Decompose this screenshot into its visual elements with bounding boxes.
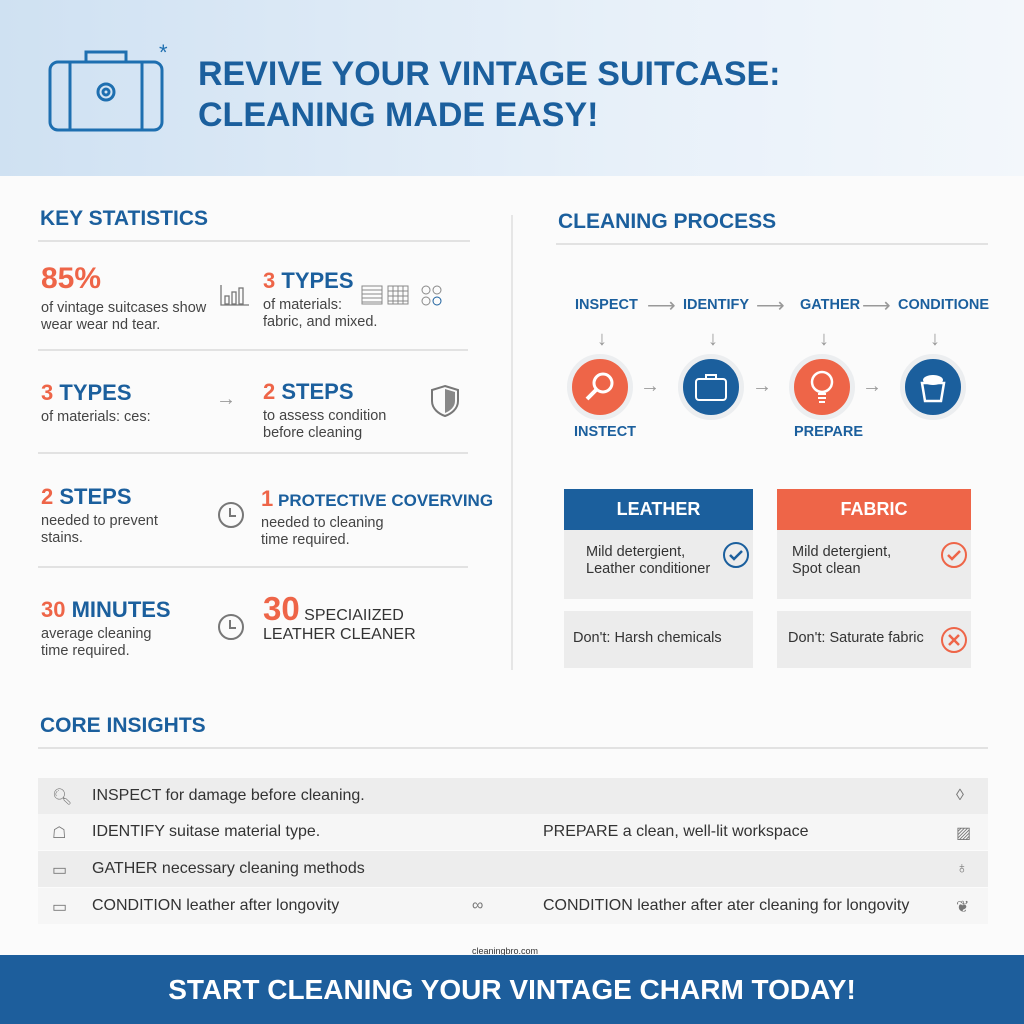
icon: bucket circle (900, 354, 966, 420)
process flow: ↓ (819, 328, 829, 350)
panel: core insights list: ❦ (956, 899, 969, 916)
panel: fabric: Don't: Saturate fabric (788, 630, 924, 646)
title: REVIVE YOUR VINTAGE SUITCASE: (198, 55, 780, 93)
panel: core insights list: ☖ (52, 825, 66, 842)
panel: core insights list: ◊ (956, 787, 964, 804)
process flow: PREPARE (794, 424, 863, 440)
stat 2 steps row3: 2 STEPS (41, 484, 132, 509)
process flow: → (862, 375, 882, 397)
panel: core insights list: ▭ (52, 862, 67, 879)
stat protective covering: needed to cleaning (261, 515, 384, 531)
stat 2 steps row3: stains. (41, 530, 83, 546)
stat 2 steps row3: needed to prevent (41, 513, 158, 529)
panel: core insights list: INSPECT for damage before cleaning. (92, 787, 365, 804)
process flow: ↓ (597, 328, 607, 350)
stat protective covering: time required. (261, 532, 350, 548)
process flow: GATHER (800, 297, 860, 313)
footer banner (0, 955, 1024, 1024)
panel: core insights list: IDENTIFY suitase material type. (92, 823, 320, 840)
heading: core insights: CORE INSIGHTS (40, 714, 206, 737)
process flow: ↓ (930, 328, 940, 350)
stat 2 steps row3 (41, 484, 158, 546)
stat 2 steps (263, 379, 386, 441)
process flow: CONDITIONE (898, 297, 989, 313)
panel: core insights list: 🔍︎ (52, 789, 72, 806)
stat 2 steps: before cleaning (263, 425, 362, 441)
stat 30 minutes: average cleaning (41, 626, 151, 642)
stat 3 types row2 (41, 380, 151, 425)
process flow: → (752, 375, 772, 397)
icon: clock (218, 502, 244, 528)
stat 3 types row2: 3 TYPES (41, 380, 132, 405)
process flow: INSTECT (574, 424, 636, 440)
divider vertical (511, 215, 513, 670)
arrow: → (216, 388, 236, 410)
icon: suitcase: * (159, 40, 168, 65)
icon: suitcase (48, 40, 168, 132)
stat 3 types: 3 TYPES (263, 268, 354, 293)
panel: leather (564, 489, 753, 668)
header band (0, 0, 1024, 176)
stat protective covering: 1 PROTECTIVE COVERVING (261, 486, 493, 511)
icon: check blue (723, 542, 749, 568)
stat 3 types: of materials: (263, 297, 342, 313)
title: CLEANING MADE EASY! (198, 96, 598, 134)
panel: core insights list: ▭ (52, 899, 67, 916)
heading: cleaning process: CLEANING PROCESS (558, 210, 776, 233)
stat 85% (41, 262, 206, 333)
stat 3 types: fabric, and mixed. (263, 314, 377, 330)
stat protective covering (261, 486, 493, 548)
stat 30 specialized: LEATHER CLEANER (263, 626, 416, 643)
panel: key statistics (38, 262, 493, 659)
process flow: IDENTIFY (683, 297, 749, 313)
panel: fabric: Spot clean (792, 561, 861, 577)
panel: leather: LEATHER (617, 499, 700, 519)
icon: material swatches (362, 286, 442, 306)
stat 30 minutes (41, 597, 171, 659)
panel: core insights list: PREPARE a clean, well-lit workspace (543, 823, 809, 840)
stat 30 minutes: time required. (41, 643, 130, 659)
title (198, 55, 780, 134)
panel: core insights list (38, 778, 988, 916)
source note: cleaningbro.com (472, 946, 538, 956)
panel: core insights list: CONDITION leather after ater cleaning for longovity (543, 897, 909, 914)
process flow: ↓ (708, 328, 718, 350)
process flow: ⟶ (862, 295, 891, 317)
process flow: ⟶ (647, 295, 676, 317)
panel: fabric: FABRIC (840, 499, 908, 519)
process flow (567, 295, 989, 440)
panel: core insights list: ∞ (472, 897, 483, 914)
stat 85%: wear wear nd tear. (41, 317, 160, 333)
panel: core insights list: CONDITION leather after longovity (92, 897, 339, 914)
stat 3 types (263, 268, 377, 330)
icon: x orange (941, 627, 967, 653)
icon: shield (431, 385, 459, 417)
stat 30 specialized: 30 SPECIAIIZED (263, 590, 404, 627)
icon: suitcase circle (678, 354, 744, 420)
stat 85%: of vintage suitcases show (41, 300, 206, 316)
stat 3 types row2: of materials: ces: (41, 409, 151, 425)
process flow: ⟶ (756, 295, 785, 317)
stat 2 steps: 2 STEPS (263, 379, 354, 404)
stat 2 steps: to assess condition (263, 408, 386, 424)
process flow: → (640, 375, 660, 397)
panel: leather: Leather conditioner (586, 561, 710, 577)
stat 30 minutes: 30 MINUTES (41, 597, 171, 622)
panel: core insights list: ▨ (956, 825, 971, 842)
stat 30 specialized (263, 590, 416, 643)
icon: clock 2 (218, 614, 244, 640)
icon: bar chart (220, 285, 249, 306)
panel: core insights list: GATHER necessary cleaning methods (92, 860, 365, 877)
step labels: INSPECT (575, 297, 638, 313)
panel: leather: Mild detergient, (586, 544, 685, 560)
panel: fabric (777, 489, 971, 668)
heading: key statistics: KEY STATISTICS (40, 207, 208, 230)
panel: fabric: Mild detergient, (792, 544, 891, 560)
icon: bulb circle (789, 354, 855, 420)
icon: check orange (941, 542, 967, 568)
footer banner: START CLEANING YOUR VINTAGE CHARM TODAY! (168, 974, 856, 1005)
stat 85%: 85% (41, 262, 101, 295)
icon: inspect circle (567, 354, 633, 420)
panel: leather: Don't: Harsh chemicals (573, 630, 722, 646)
panel: core insights list: ♁ (956, 860, 968, 877)
